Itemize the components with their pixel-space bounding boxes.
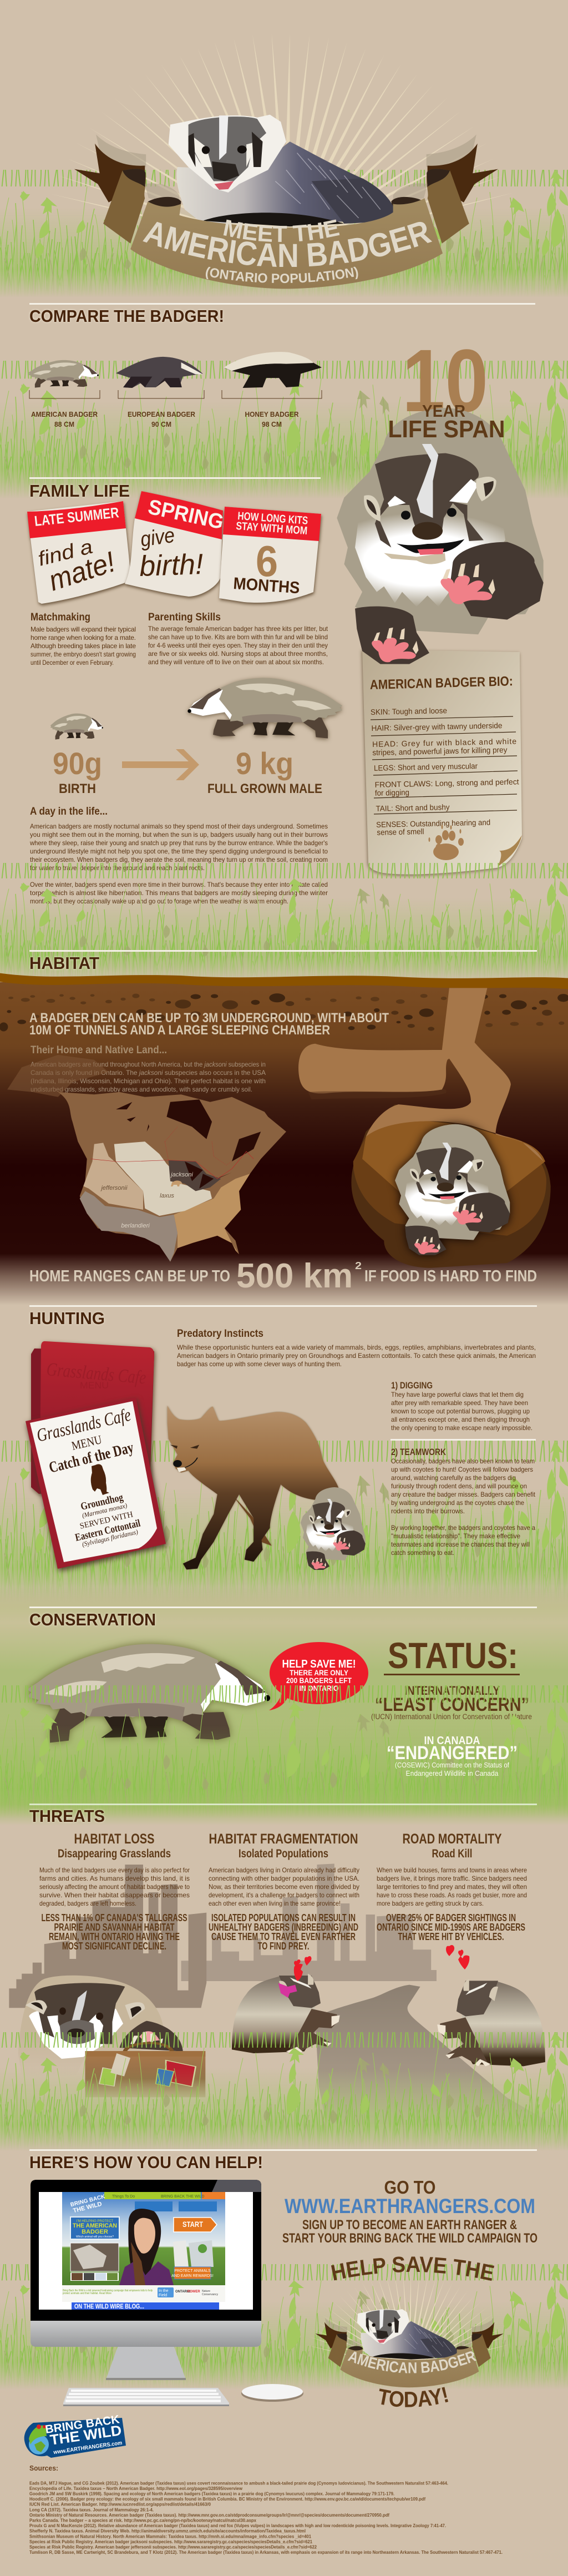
text block: a day in the life: for water to travel deeper into the ground and reach plant roots. (30, 864, 205, 872)
threat column: habitat fragmentation: HABITAT FRAGMENTATION (209, 1831, 358, 1847)
threat column: habitat fragmentation: CAUSE THEM TO TRAVEL EVEN FARTHER (211, 1931, 356, 1942)
mini banner: american badger (307, 2274, 509, 2387)
life span label (388, 401, 505, 443)
call to action text: GO TO (384, 2177, 436, 2198)
text block: digging (390, 1380, 536, 1441)
comparison: american badger: AMERICAN BADGER (31, 410, 98, 418)
illustration: badger with suitcase (18, 1976, 205, 2097)
title: AMERICAN BADGER (143, 222, 432, 267)
section rule and heading: compare: COMPARE THE BADGER! (29, 306, 224, 326)
sources: IUCN Red List. American Badger. http://www.iucnredlist.org/apps/redlist/details/41663/0 (29, 2502, 211, 2507)
threat column: habitat loss: survive. When their habitat disappears or becomes (39, 1891, 190, 1899)
call to action text: WWW.EARTHRANGERS.COM (285, 2195, 535, 2218)
text block: teamwork: around, watching carefully as the badgers dig (391, 1474, 516, 1482)
section rule and heading: habitat: HABITAT (29, 953, 99, 973)
website screenshot: BADGER (82, 2229, 108, 2235)
speech bubble: help save me: 200 BADGERS LEFT (286, 1676, 352, 1685)
text block: teamwork: any creature the badger misses. Badgers can benefit (391, 1491, 536, 1498)
burrow tunnels and den (298, 988, 551, 1268)
threat column: habitat loss: PRAIRIE AND SAVANNAH HABITAT (54, 1922, 174, 1933)
soil rocks (0, 993, 568, 1031)
status panel (371, 1635, 532, 1721)
section rule and heading: conservation: CONSERVATION (29, 1610, 156, 1629)
mini banner: american badger: AMERICAN BADGER (347, 2351, 477, 2373)
text block: a day in the life: you might see them out in the morning, but when the sun is up, badgers usually hang out in their burrows (30, 831, 328, 839)
threat column: habitat fragmentation: Isolated Populations (239, 1847, 328, 1860)
grass: hero (0, 170, 568, 297)
sources: Eads DA, MTJ Hague, and CG Zoubek (2012). American badger (Taxidea taxus) uses covert reconnaissance to ambush a black-tailed prairie dog (Cynomys ludovicianus). The Southwestern Naturalist 57:463-464. (29, 2481, 448, 2486)
grass: compare band (0, 361, 568, 498)
comparison: american badger (28, 360, 100, 428)
illustration: conservation badger (27, 1644, 270, 1742)
threat column: habitat fragmentation: American badgers living in Ontario already had difficulty (209, 1866, 359, 1874)
status panel: “LEAST CONCERN” (375, 1694, 529, 1715)
comparison: european badger: EUROPEAN BADGER (128, 410, 196, 418)
threat column: habitat loss: HABITAT LOSS (74, 1831, 154, 1847)
website screenshot: ON THE WILD WIRE BLOG... (74, 2302, 144, 2310)
text block: teamwork: by waiting underground as the coyotes chase the (391, 1499, 524, 1507)
life span label: LIFE SPAN (388, 416, 505, 443)
threat column: road mortality: OVER 25% OF BADGER SIGHTINGS IN (386, 1912, 516, 1923)
panel: american badger bio note: LEGS: Short and very muscular (374, 761, 478, 772)
title: MEET THE (223, 220, 339, 242)
text block: badger den fact: A BADGER DEN CAN BE UP TO 3M UNDERGROUND, WITH ABOUT (29, 1011, 389, 1026)
illustration: female badger with bow (232, 1974, 340, 2053)
calendar page: spring: birth! (139, 548, 204, 583)
text block: teamwork: catch something to eat. (391, 1549, 454, 1557)
status panel: STATUS: (388, 1635, 518, 1676)
text block: digging: the only opening to make escape nearly impossible. (391, 1424, 532, 1432)
threat column: habitat loss: farms and cities. As humans develop this land, it is (39, 1875, 190, 1882)
threat column: road mortality: have to cross these roads. As roads get busier, more and (377, 1891, 527, 1899)
icon: full grown badger (187, 678, 342, 739)
threat column: habitat fragmentation: connecting with other badger populations in the USA. (209, 1875, 359, 1882)
threat column: road mortality: badgers live, it brings more traffic. Since badgers need (377, 1875, 527, 1882)
text block: digging: all entrances except one, and then digging through (391, 1416, 530, 1423)
section rule and heading: family life (29, 477, 321, 501)
website screenshot: Things To Do (112, 2195, 135, 2199)
grass: habitat band (0, 863, 568, 982)
sources: Proulx G and N MacKenzie (2012). Relative abundance of American badger (Taxidea taxus) and red fox (Vulpes vulpes) in landscapes with high and low rodenticide poisoning levels. Integrative Zoology 7:41-47. (29, 2523, 446, 2528)
text block: teamwork (391, 1447, 536, 1557)
stat: home ranges: 500 km (236, 1257, 353, 1295)
text block: digging: 1) DIGGING (391, 1380, 433, 1391)
status panel: INTERNATIONALLY (404, 1684, 500, 1698)
illustration: hunting badger (301, 1487, 366, 1570)
calendar page: late summer: LATE SUMMER (33, 504, 120, 529)
section rule and heading: habitat (29, 950, 537, 973)
text block: a day in the life: their ecosystem. When badgers dig, they aerate the soil, meaning they turn up or mix the soil, creating room (30, 856, 328, 863)
threat column: habitat loss: Much of the land badgers use every day is also perfect for (39, 1866, 190, 1874)
grass: threats band (0, 2032, 568, 2151)
sources: Tumlison R, DB Sasse, ME Cartwright, SC Brandebura, and T Klotz (2012). The American badger (Taxidea taxus) in Arkansas, with emphasis on expansion of its range into Northeastern Arkansas. The Southwestern Naturalist 57:467-471. (29, 2550, 503, 2555)
illustration: coyote (168, 1406, 339, 1569)
sources: Sources: (29, 2464, 58, 2472)
comparison: american badger: 88 CM (54, 420, 74, 428)
website screenshot: Which animal will you choose? (76, 2235, 114, 2239)
sources: Species at Risk Public Registry. American badger jacksoni subspecies. http://www.sararegistry.gc.ca/species/speciesDetails_e.cfm?sid=621 (29, 2539, 313, 2544)
sources: Hoodicoff C. (2006). Badger prey ecology: the ecology of six small mammals found in British Columbia. BC Ministry of the Environment. http://www.env.gov.bc.ca/wld/documents/techpub/wr109.pdf (29, 2497, 425, 2502)
threat column: road mortality: more badgers are getting struck by cars. (377, 1900, 484, 1907)
map: north america subspecies ranges: laxus (160, 1193, 174, 1199)
growth chart: birth to full grown: 90g (53, 746, 102, 781)
text block: parenting skills (148, 612, 328, 666)
map: north america subspecies ranges: jacksoni (170, 1171, 193, 1178)
stat: home ranges: 2 (355, 1260, 362, 1271)
section rule and heading: threats (29, 1804, 537, 1826)
grass: conservation band (0, 1685, 568, 1818)
threat column: habitat loss: degraded, badgers are left homeless. (39, 1900, 136, 1907)
sources: Smithsonian Museum of Natural History. North American Mammals: Taxidea taxus. http://mnh.si.edu/mna/image_info.cfm?species _id=401 (29, 2534, 312, 2539)
text block: digging: They have large powerful claws that let them dig (391, 1391, 524, 1398)
text block: teamwork: up with coyotes to hunt! Coyotes will follow badgers (391, 1466, 533, 1473)
status: canada: IN CANADA (424, 1735, 480, 1747)
menu card: grasslands cafe: MENU (80, 1380, 109, 1391)
threat column: habitat fragmentation: ISOLATED POPULATIONS CAN RESULT IN (211, 1912, 356, 1923)
comparison: honey badger: HONEY BADGER (245, 410, 299, 418)
panel: american badger bio note: TAIL: Short and bushy (376, 802, 450, 813)
section rule and heading: hunting (29, 1305, 537, 1328)
sources: Shefferly N. Taxidea taxus. Animal Diversity Web. http://animaldiversity.ummz.umich.edu/site/accounts/information/Taxidea_taxus.html (29, 2529, 306, 2534)
comparison: european badger (116, 357, 204, 428)
illustration: road badger (437, 1979, 545, 2066)
threat column: habitat fragmentation: UNHEALTHY BADGERS (INBREEDING) AND (209, 1922, 358, 1933)
text block: teamwork: By working together, the badgers and coyotes have a (391, 1524, 535, 1532)
text block: teamwork: rodents into their burrows. (391, 1507, 465, 1515)
text block: a day in the life (29, 806, 328, 905)
text block: their home and native land: undisturbed grasslands, shrubby areas and woodlots, with sandy or crumbly soil. (31, 1085, 252, 1093)
status: canada (387, 1735, 518, 1777)
text block: a day in the life: A day in the life... (30, 806, 108, 817)
growth chart: birth to full grown: BIRTH (59, 781, 96, 796)
calendar page: how long kits stay with mom: MONTHS (233, 574, 301, 597)
icon: pink bow (278, 1983, 297, 1998)
today: arched heading (379, 2387, 448, 2407)
grass: hunting band (0, 1441, 568, 1603)
panel: american badger bio note: SKIN: Tough and loose (371, 706, 447, 716)
website screenshot: protect animals and their habitat. Read More (63, 2292, 111, 2295)
threat column: road mortality: When we build houses, farms and towns in areas where (377, 1866, 527, 1874)
calendar page: spring (125, 491, 226, 597)
panel: underground soil (0, 973, 568, 1305)
text block: their home and native land: American badgers are found throughout North America, but the jacksoni subspecies in (31, 1060, 266, 1068)
life span number: 10 (402, 331, 488, 430)
website screenshot: ONTARIO (175, 2290, 191, 2294)
text block: matchmaking: home range when looking for a mate. (31, 634, 136, 642)
text block: parenting skills: are five or six weeks old. Nursing stops at about three months, (148, 650, 328, 658)
sources: Long CA (1972). Taxidea taxus. Journal of Mammalogy 26:1-4. (29, 2507, 154, 2512)
section rule and heading: compare (29, 303, 535, 326)
section rule and heading: hunting: HUNTING (29, 1309, 105, 1328)
menu card: grasslands cafe: (Sylvilagus floridanus) (82, 1528, 139, 1548)
logo: bring back the wild: THE WILD (49, 2422, 123, 2448)
panel: american badger bio note: HAIR: Silver-grey with tawny underside (371, 721, 503, 733)
panel: american badger bio note (362, 649, 522, 875)
growth chart: birth to full grown: 9 kg (236, 746, 293, 781)
website screenshot: In the (159, 2289, 169, 2293)
text block: parenting skills: and they will venture off to live on their own at about six months. (148, 658, 324, 666)
website screenshot: POWER (187, 2290, 200, 2294)
threat column: habitat fragmentation: development, it's a challenge for badgers to connect with (209, 1891, 359, 1899)
calendar page: late summer (27, 501, 130, 604)
threat column: habitat loss: LESS THAN 1% OF CANADA'S TALLGRASS (41, 1912, 187, 1923)
sources: Ontario Ministry of Natural Resources. American badger (Taxidea taxus). http://www.mnr.gov.on.ca/stdprodconsume/groups/lr/@mnr/@species/documents/document/270950.pdf (29, 2513, 389, 2518)
panel: american badger bio note: sense of smell (377, 827, 424, 837)
threat column: road mortality (377, 1831, 527, 1942)
website screenshot: I'M HELPING PROTECT (77, 2220, 113, 2223)
website screenshot: Field (159, 2294, 167, 2297)
text block: predatory instincts (177, 1328, 536, 1368)
logo: bring back the wild: BRING BACK (44, 2413, 120, 2436)
comparison: honey badger (222, 352, 322, 428)
website screenshot: BRING BACK (70, 2194, 106, 2208)
text block: their home and native land: Their Home and Native Land... (31, 1044, 167, 1056)
sources (29, 2464, 503, 2555)
icon: groundhog silhouette (91, 1464, 109, 1495)
speech bubble: help save me: IN ONTARIO (300, 1684, 339, 1693)
website screenshot: BRING BACK THE WILD (161, 2195, 204, 2199)
threat column: road mortality: large territories to find prey and mates, they will often (377, 1883, 527, 1891)
section rule and heading: threats: THREATS (29, 1806, 105, 1826)
sources: Encyclopedia of Life. Taxidea taxus – North American Badger. http://www.eol.org/pages/328595/overview (29, 2486, 243, 2491)
menu card: grasslands cafe: Grasslands Cafe (45, 1359, 147, 1388)
panel: american badger bio note: stripes, and powerful jaws for killing prey (372, 745, 508, 757)
menu card: grasslands cafe: Groundhog (79, 1492, 125, 1513)
threat column: road mortality: ROAD MORTALITY (403, 1831, 502, 1847)
text block: a day in the life: underground lifestyle might not help you spot one, the time they spend digging underground is beneficial to (30, 847, 328, 855)
calendar page: spring: give (139, 524, 176, 552)
section rule and heading: conservation (29, 1607, 537, 1629)
city skyline (9, 1863, 437, 2008)
logo: bring back the wild (24, 2413, 126, 2458)
threat column: road mortality: THAT WERE HIT BY VEHICLES. (398, 1931, 504, 1942)
calendar page: how long kits stay with mom: HOW LONG KITS (237, 510, 308, 527)
section rule and heading: family life: FAMILY LIFE (29, 481, 130, 501)
speech bubble: help save me: HELP SAVE ME! (282, 1658, 356, 1670)
text block: a day in the life: Over the winter, badgers spend even more time in their burrows. That's because they enter into a state called (30, 881, 328, 888)
text block: digging: known to scope out potential burrows, plugging up (391, 1407, 530, 1415)
website screenshot: START (182, 2220, 203, 2229)
text block: parenting skills: The average female American badger has three kits per litter, but (148, 625, 328, 633)
threat column: habitat loss: seriously affecting the amount of habitat badgers have to (39, 1883, 190, 1891)
text block: badger den fact: 10M OF TUNNELS AND A LARGE SLEEPING CHAMBER (29, 1023, 330, 1038)
map: north america subspecies ranges (7, 1055, 286, 1262)
menu card: grasslands cafe (26, 1341, 166, 1569)
section rule and heading: how you can help: HERE’S HOW YOU CAN HELP! (29, 2153, 263, 2172)
threat column: habitat loss: REMAIN, WITH ONTARIO HAVING THE (49, 1931, 180, 1942)
text block: matchmaking: Matchmaking (31, 612, 90, 623)
text block: their home and native land (31, 1044, 266, 1093)
badger in den (395, 1124, 510, 1255)
speech bubble: help save me (269, 1642, 368, 1710)
text block: predatory instincts: Predatory Instincts (177, 1328, 263, 1340)
text block: teamwork: furiously through rodent dens, and will pounce on (391, 1482, 527, 1490)
menu card: grasslands cafe: (Marmota monax) (82, 1502, 128, 1519)
panel: american badger bio note: HEAD: Grey fur with black and white (372, 736, 516, 749)
panel: conservation background (0, 1587, 568, 1826)
growth chart: birth to full grown: FULL GROWN MALE (207, 781, 322, 796)
status: canada: (COSEWIC) Committee on the Status of (395, 1761, 509, 1769)
map: north america subspecies ranges: berlandieri (121, 1223, 150, 1229)
threat column: habitat loss: MOST SIGNIFICANT DECLINE. (62, 1941, 166, 1952)
menu card: grasslands cafe: SERVED WITH (79, 1510, 134, 1531)
website screenshot: PROTECT ANIMALS (174, 2269, 211, 2273)
american badger illustration: front view (337, 408, 544, 664)
website screenshot: THE AMERICAN (73, 2223, 117, 2229)
text block: their home and native land: (Indiana, Illinois, Wisconsin, Michigan and Ohio). Their perfect habitat is one with (31, 1077, 266, 1085)
text block: teamwork: "mutualistic relationship". They make effective (391, 1532, 520, 1540)
text block: their home and native land: Canada is only found in Ontario. The jacksoni subspecies also occurs in the USA (31, 1069, 266, 1077)
sources: Species at Risk Public Registry. American badger jeffersonii subspecies. http://www.sararegistry.gc.ca/species/speciesDetails_e.cfm?sid=622 (29, 2544, 317, 2549)
threat column: habitat fragmentation: Now, as their territories become even more divided by (209, 1883, 359, 1891)
hero banner: sun rays, photo and ribbon (50, 33, 514, 289)
arrow (122, 749, 199, 780)
growth chart: birth to full grown (50, 678, 342, 796)
threat column: habitat loss (39, 1831, 190, 1952)
panel: american badger bio note: for digging (375, 788, 409, 797)
calendar page: how long kits stay with mom: 6 (256, 537, 278, 585)
text block: a day in the life: months, but they occasionally wake up and go out to forage when the weather is warm enough. (30, 897, 288, 905)
website screenshot: Bring Back the Wild is a kid powered fundraising campaign that empowers kids to help (63, 2289, 153, 2292)
illustration: road (315, 1985, 558, 2127)
panel: american badger bio note: FRONT CLAWS: Long, strong and perfect (374, 777, 519, 789)
text block: matchmaking: Although breeding takes place in late (31, 642, 136, 650)
text block: parenting skills: she can have up to five. Kits are born with thin fur and will be blind (148, 633, 328, 641)
today: arched heading: TODAY! (379, 2387, 448, 2407)
menu card: grasslands cafe: Catch of the Day (47, 1439, 135, 1477)
calendar page: spring: SPRING (146, 496, 226, 534)
text block: badger den fact (29, 1011, 389, 1038)
title: (ONTARIO POPULATION) (205, 266, 358, 283)
calendar page: how long kits stay with mom (219, 507, 321, 603)
panel: american badger bio note: AMERICAN BADGER BIO: (369, 674, 513, 693)
text block: predatory instincts: While these opportunistic hunters eat a wide variety of mammals, birds, eggs, reptiles, amphibians, invertebrates and plants, (177, 1343, 536, 1351)
menu card: grasslands cafe: Eastern Cottontail (74, 1517, 141, 1544)
computer monitor with earth rangers website (31, 2180, 261, 2380)
threat column: habitat fragmentation: each other even when living in the same province! (209, 1900, 341, 1907)
menu card: grasslands cafe: Grasslands Cafe (35, 1405, 133, 1446)
comparison: honey badger: 98 CM (262, 420, 282, 428)
text block: a day in the life: torpor, which is almost like hibernation. This means that badgers are mostly sleeping during the winter (30, 889, 328, 897)
stat: home ranges: IF FOOD IS HARD TO FIND (364, 1267, 537, 1285)
section rule and heading: how you can help (29, 2149, 537, 2172)
calendar page: late summer: mate! (45, 546, 119, 597)
threat column: habitat fragmentation: TO FIND PREY. (257, 1941, 310, 1952)
icon: newborn badger (50, 714, 103, 740)
map: north america subspecies ranges: jeffersonii (100, 1185, 128, 1191)
sources: Goodrich JM and SW Buskirk (1998). Spacing and ecology of North American badgers (Taxidea taxus) in a prairie dog (Cynomys leucurus) complex. Journal of Mammalogy 79:171-179. (29, 2491, 394, 2496)
calendar page: how long kits stay with mom: STAY WITH MOM (236, 520, 308, 537)
calendar page: late summer: find a (36, 535, 95, 570)
website screenshot: Conservancy (202, 2293, 219, 2296)
text block: a day in the life: where they sleep, raise their young and snatch up prey that runs by the burrow entrance. While the badger's (29, 839, 328, 847)
comparison: european badger: 90 CM (151, 420, 171, 428)
icon: broken hearts, road badger (446, 1945, 469, 1969)
threat column: habitat loss: Disappearing Grasslands (58, 1847, 171, 1860)
text block: matchmaking: until December or even February. (31, 659, 114, 666)
text block: teamwork: Occasionally, badgers have also been known to team (391, 1457, 535, 1465)
text block: parenting skills: Parenting Skills (148, 612, 221, 623)
text block: a day in the life: American badgers are mostly nocturnal animals so they spend most of their days underground. Sometimes (30, 822, 328, 830)
text block: matchmaking: summer, the embryo doesn't start growing (31, 650, 136, 658)
status: canada: Endangered Wildlife in Canada (406, 1769, 499, 1777)
help save the: arched heading: HELP SAVE THE (331, 2256, 495, 2281)
panel: american badger bio note: SENSES: Outstanding hearing and (376, 818, 490, 829)
menu card: grasslands cafe: MENU (70, 1432, 103, 1453)
text block: predatory instincts: American badgers in Ontario primarily prey on Groundhogs and Eastern cottontails. To catch these quick animals, the American (177, 1352, 536, 1360)
text block: matchmaking: Male badgers will expand their typical (31, 625, 136, 633)
website screenshot: THE WILD (72, 2201, 103, 2214)
stat: home ranges: HOME RANGES CAN BE UP TO (29, 1267, 230, 1285)
status: canada: “ENDANGERED” (387, 1742, 518, 1764)
text block: teamwork: 2) TEAMWORK (391, 1447, 447, 1457)
speech bubble: help save me: THERE ARE ONLY (290, 1668, 349, 1677)
text block: digging: after prey with remarkable speed. They have been (391, 1399, 528, 1407)
text block: parenting skills: for 4-6 weeks until their eyes open. They stay in their den until they (148, 642, 328, 649)
text block: matchmaking (31, 612, 136, 666)
logo: bring back the wild: www.EARTHRANGERS.com (53, 2440, 123, 2456)
website screenshot: AND EARN REWARDS! (171, 2274, 214, 2278)
website screenshot (39, 2192, 253, 2310)
call to action text (282, 2177, 537, 2246)
stat: home ranges (29, 1257, 537, 1295)
threat column: habitat fragmentation (209, 1831, 359, 1952)
sources: Parks Canada. The badger – a species at risk. http://www.pc.gc.ca/eng/pn-np/bc/kootenay/natcul/natcul30.aspx (29, 2518, 257, 2523)
text block: predatory instincts: badger has come up with some clever ways of hunting them. (177, 1360, 342, 1368)
grass: help band (0, 2264, 568, 2389)
keyboard and mouse (63, 2384, 303, 2406)
threat column: road mortality: Road Kill (432, 1847, 473, 1860)
text block: teamwork: teammates and increase the chances that they will (391, 1540, 530, 1548)
icon: broken hearts, female badger (294, 1956, 312, 1981)
website screenshot: Nature (202, 2290, 210, 2293)
life span label: YEAR (422, 401, 465, 421)
status panel: (IUCN) International Union for Conservation of Nature (371, 1713, 532, 1721)
